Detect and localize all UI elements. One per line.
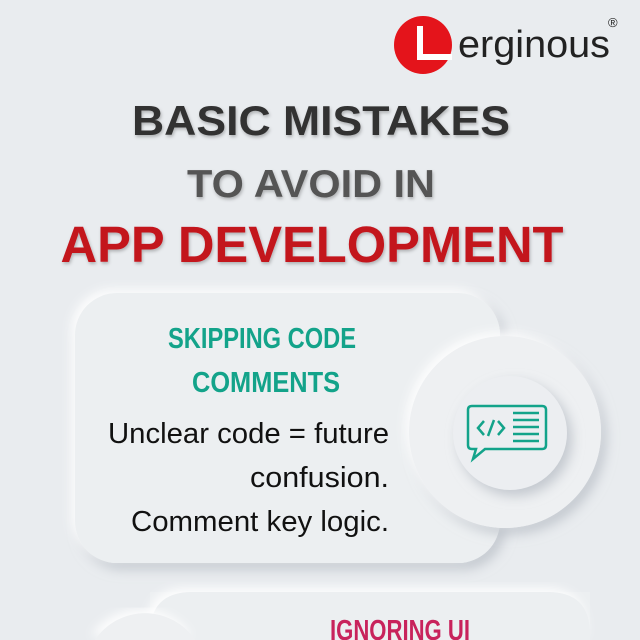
- icon: code comment circle: [409, 336, 601, 528]
- title: [60, 97, 564, 273]
- title: TO AVOID IN: [187, 163, 435, 206]
- panel: skipping code comments: [75, 293, 500, 563]
- panel: ignoring UI (partial): [95, 592, 590, 640]
- body text: confusion.: [250, 462, 389, 494]
- body text: [108, 418, 389, 538]
- title: BASIC MISTAKES: [132, 97, 510, 144]
- logo: ®: [608, 15, 618, 30]
- title: APP DEVELOPMENT: [60, 216, 564, 273]
- body text: Comment key logic.: [131, 506, 389, 538]
- heading: SKIPPING CODE: [168, 323, 356, 355]
- panel: skipping code comments: COMMENTS: [192, 367, 340, 399]
- body text: Unclear code = future: [108, 418, 389, 450]
- logo: [394, 15, 618, 74]
- logo: erginous: [458, 24, 610, 66]
